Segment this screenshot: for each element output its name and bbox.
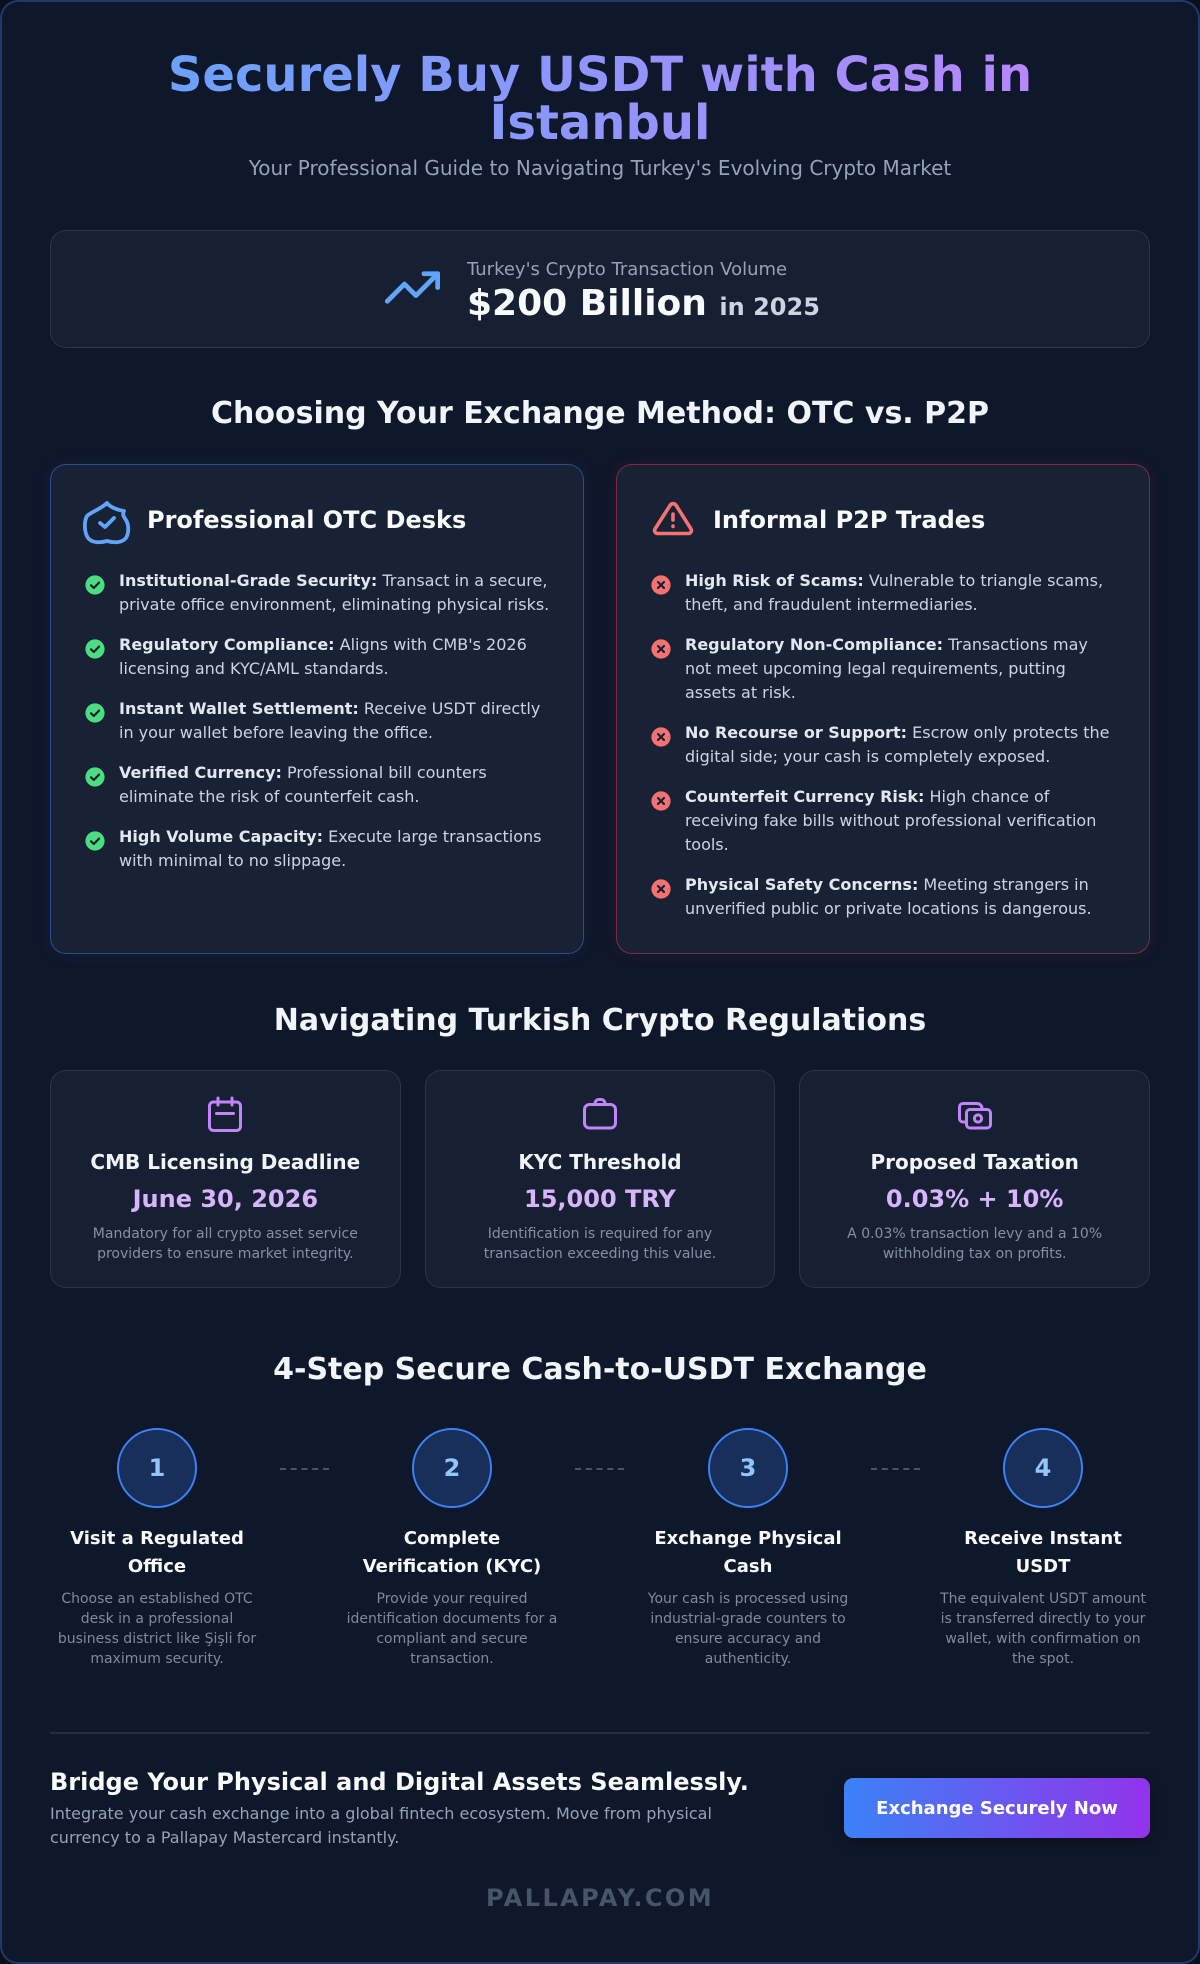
- brand footer: PALLAPAY.COM: [486, 1884, 714, 1912]
- step description: The equivalent USDT amount: [940, 1591, 1146, 1607]
- step number: 4: [1035, 1454, 1051, 1482]
- step title: Exchange Physical: [654, 1528, 842, 1549]
- arrow: dashed connector: [871, 1468, 920, 1470]
- card title: KYC Threshold: [518, 1150, 682, 1174]
- item text: with minimal to no slippage.: [119, 851, 346, 870]
- card description: transaction exceeding this value.: [484, 1246, 716, 1262]
- card description: [484, 1226, 716, 1262]
- item text: [685, 787, 1096, 854]
- step description: transaction.: [410, 1651, 494, 1667]
- card value: June 30, 2026: [133, 1185, 318, 1213]
- step title: [332, 1525, 572, 1581]
- title: Istanbul: [490, 95, 710, 151]
- step description: identification documents for a: [347, 1611, 557, 1627]
- list item: [85, 635, 527, 678]
- icon: check: [85, 575, 105, 595]
- step 4: [923, 1428, 1163, 1668]
- panel title: Informal P2P Trades: [713, 506, 985, 534]
- item text: private office environment, eliminating physical risks.: [119, 595, 549, 614]
- icon: check: [85, 703, 105, 723]
- card description: Mandatory for all crypto asset service: [93, 1226, 358, 1242]
- card description: Identification is required for any: [488, 1226, 712, 1242]
- icon: cash: [958, 1102, 992, 1130]
- icon: cross: [651, 791, 671, 811]
- step number: [1003, 1428, 1083, 1508]
- card title: Proposed Taxation: [870, 1150, 1079, 1174]
- card description: providers to ensure market integrity.: [97, 1246, 354, 1262]
- step description: the spot.: [1012, 1651, 1074, 1667]
- step description: [332, 1589, 572, 1669]
- item text: [685, 635, 1088, 702]
- heading: regulations: Navigating Turkish Crypto Regulations: [274, 1003, 926, 1038]
- icon: warning triangle: [652, 502, 694, 536]
- panel: informal P2P trades: [616, 464, 1150, 954]
- panel: professional OTC desks: [50, 464, 584, 954]
- step description: ensure accuracy and: [675, 1631, 821, 1647]
- call to action button: [844, 1778, 1150, 1838]
- icon: cross: [651, 879, 671, 899]
- icon: check: [85, 831, 105, 851]
- item text: [119, 763, 487, 806]
- call to action text: currency to a Pallapay Mastercard instantly.: [50, 1828, 399, 1847]
- item text: Verified Currency: Professional bill counters: [119, 763, 487, 782]
- item text: assets at risk.: [685, 683, 796, 702]
- item text: High Volume Capacity: Execute large transactions: [119, 827, 542, 846]
- item text: Regulatory Compliance: Aligns with CMB's 2026: [119, 635, 527, 654]
- heading: 4-step process: 4-Step Secure Cash-to-USDT Exchange: [273, 1352, 927, 1387]
- step description: authenticity.: [705, 1651, 791, 1667]
- item text: eliminate the risk of counterfeit cash.: [119, 787, 419, 806]
- item text: licensing and KYC/AML standards.: [119, 659, 389, 678]
- item text: Institutional-Grade Security: Transact in a secure,: [119, 571, 547, 590]
- step description: desk in a professional: [81, 1611, 233, 1627]
- item text: [685, 571, 1103, 614]
- list item: [651, 787, 1096, 854]
- arrow: dashed connector: [575, 1468, 624, 1470]
- step title: Office: [128, 1556, 186, 1577]
- step title: [923, 1525, 1163, 1581]
- item text: digital side; your cash is completely exposed.: [685, 747, 1050, 766]
- item text: Instant Wallet Settlement: Receive USDT directly: [119, 699, 540, 718]
- item text: [119, 571, 549, 614]
- item text: No Recourse or Support: Escrow only protects the: [685, 723, 1110, 742]
- icon: trending up arrow: [385, 271, 440, 304]
- list item: [651, 635, 1088, 702]
- step description: is transferred directly to your: [941, 1611, 1145, 1627]
- step description: compliant and secure: [376, 1631, 528, 1647]
- item text: unverified public or private locations is dangerous.: [685, 899, 1092, 918]
- subtitle: Your Professional Guide to Navigating Turkey's Evolving Crypto Market: [249, 156, 951, 180]
- item text: theft, and fraudulent intermediaries.: [685, 595, 978, 614]
- step number: [117, 1428, 197, 1508]
- step description: Provide your required: [377, 1591, 527, 1607]
- step title: USDT: [1016, 1556, 1070, 1577]
- step title: Receive Instant: [964, 1528, 1122, 1549]
- heading: exchange method: Choosing Your Exchange Method: OTC vs. P2P: [211, 396, 989, 431]
- item text: in your wallet before leaving the office.: [119, 723, 433, 742]
- item text: [685, 723, 1110, 766]
- stat label: Turkey's Crypto Transaction Volume: [467, 259, 787, 280]
- panel title: Professional OTC Desks: [147, 506, 466, 534]
- title: [50, 51, 1150, 147]
- card value: 15,000 TRY: [524, 1185, 676, 1213]
- item text: [119, 827, 542, 870]
- call to action text: Integrate your cash exchange into a global fintech ecosystem. Move from physical: [50, 1804, 712, 1823]
- list item: [85, 699, 540, 742]
- icon: cross: [651, 727, 671, 747]
- step description: industrial-grade counters to: [650, 1611, 846, 1627]
- icon: briefcase: [583, 1098, 617, 1130]
- card description: [847, 1226, 1102, 1262]
- step title: Cash: [724, 1556, 772, 1577]
- step description: Your cash is processed using: [648, 1591, 848, 1607]
- step description: [37, 1589, 277, 1669]
- panel: transaction volume stat: [50, 230, 1150, 348]
- step number: 2: [444, 1454, 460, 1482]
- list item: [85, 763, 487, 806]
- card title: CMB Licensing Deadline: [90, 1150, 360, 1174]
- item text: Counterfeit Currency Risk: High chance of: [685, 787, 1049, 806]
- stat value: $200 Billion in 2025: [467, 283, 820, 324]
- item text: not meet upcoming legal requirements, putting: [685, 659, 1066, 678]
- list item: [85, 827, 542, 870]
- list item: [651, 723, 1110, 766]
- item text: High Risk of Scams: Vulnerable to triangle scams,: [685, 571, 1103, 590]
- title: Securely Buy USDT with Cash in: [168, 47, 1032, 103]
- step 1: [37, 1428, 277, 1668]
- list item: [651, 571, 1103, 614]
- step description: maximum security.: [90, 1651, 224, 1667]
- arrow: dashed connector: [280, 1468, 329, 1470]
- card description: withholding tax on profits.: [883, 1246, 1066, 1262]
- card description: A 0.03% transaction levy and a 10%: [847, 1226, 1102, 1242]
- step title: Verification (KYC): [363, 1556, 541, 1577]
- step title: [37, 1525, 277, 1581]
- icon: cross: [651, 575, 671, 595]
- step description: [628, 1589, 868, 1669]
- step title: [628, 1525, 868, 1581]
- item text: receiving fake bills without professional verification: [685, 811, 1096, 830]
- step 2: [332, 1428, 572, 1668]
- step 3: [628, 1428, 868, 1668]
- card description: [93, 1226, 358, 1262]
- panel: licensing deadline: [50, 1070, 401, 1288]
- panel: proposed taxation: [799, 1070, 1150, 1288]
- icon: calendar: [208, 1096, 242, 1132]
- call to action heading: Bridge Your Physical and Digital Assets Seamlessly.: [50, 1768, 749, 1796]
- step title: Visit a Regulated: [70, 1528, 244, 1549]
- card value: 0.03% + 10%: [886, 1185, 1063, 1213]
- step number: 1: [149, 1454, 165, 1482]
- icon: check: [85, 767, 105, 787]
- icon: check: [85, 639, 105, 659]
- step description: wallet, with confirmation on: [945, 1631, 1141, 1647]
- panel: KYC threshold: [425, 1070, 775, 1288]
- item text: Physical Safety Concerns: Meeting strangers in: [685, 875, 1089, 894]
- item text: [119, 635, 527, 678]
- list item: [651, 875, 1092, 918]
- step description: [923, 1589, 1163, 1669]
- icon: shield check: [82, 501, 130, 544]
- list item: [85, 571, 549, 614]
- item text: tools.: [685, 835, 729, 854]
- step title: Complete: [404, 1528, 500, 1549]
- call to action text: [50, 1802, 712, 1850]
- icon: cross: [651, 639, 671, 659]
- item text: [685, 875, 1092, 918]
- item text: [119, 699, 540, 742]
- step description: Choose an established OTC: [61, 1591, 253, 1607]
- step description: business district like Şişli for: [58, 1631, 256, 1647]
- call to action button: Exchange Securely Now: [876, 1798, 1118, 1819]
- item text: Regulatory Non-Compliance: Transactions may: [685, 635, 1088, 654]
- step number: [412, 1428, 492, 1508]
- step number: 3: [740, 1454, 756, 1482]
- step number: [708, 1428, 788, 1508]
